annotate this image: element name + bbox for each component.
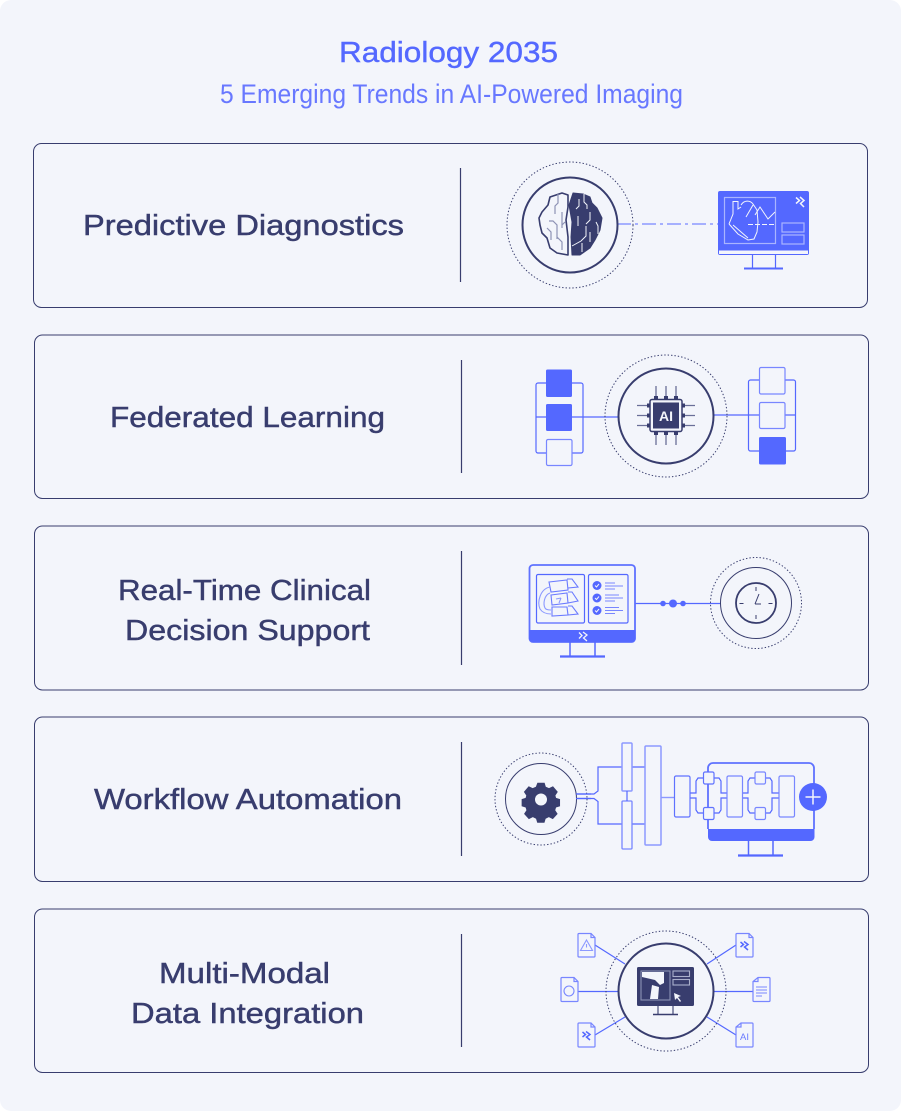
icon: gear in circle bbox=[495, 753, 591, 845]
diagram: right node group bbox=[712, 368, 796, 464]
heading: real-time clinical decision support: Real-Time Clinical bbox=[118, 575, 371, 607]
icon: document file bbox=[753, 978, 770, 1002]
icon: monitor with workflow bbox=[674, 763, 827, 856]
diagram: workflow branches bbox=[576, 743, 674, 849]
icon: heart monitor bbox=[718, 191, 809, 268]
icon: AI file bbox=[736, 1023, 753, 1047]
icon: brain in circle bbox=[507, 162, 633, 288]
heading: federated learning: Federated Learning bbox=[110, 402, 385, 434]
panel: workflow automation bbox=[34, 717, 868, 882]
icon: AI chip in circle bbox=[605, 355, 727, 477]
icon: warning file bbox=[578, 934, 595, 957]
heading: predictive diagnostics: Predictive Diagnostics bbox=[83, 210, 404, 242]
panel: real-time clinical decision support bbox=[34, 526, 868, 690]
icon: circle file bbox=[561, 978, 578, 1002]
icon: logo file right bbox=[736, 934, 753, 957]
panel: predictive diagnostics bbox=[34, 144, 868, 308]
icon: AI file: AI bbox=[740, 1032, 749, 1043]
subtitle: 5 Emerging Trends in AI-Powered Imaging bbox=[220, 79, 683, 109]
icon: clock in circle bbox=[710, 558, 802, 648]
diagram: left node group bbox=[536, 370, 620, 466]
connector: dashed line bbox=[617, 223, 718, 225]
heading: real-time clinical decision support bbox=[118, 575, 371, 647]
icon: AI chip in circle: AI bbox=[659, 408, 673, 424]
connector: dotted link bbox=[635, 600, 722, 608]
heading: multi-modal data integration bbox=[131, 958, 364, 1030]
panel: multi-modal data integration bbox=[34, 909, 868, 1072]
icon: logo file left bbox=[578, 1023, 595, 1047]
heading: multi-modal data integration: Multi-Modal bbox=[159, 958, 330, 990]
icon: monitor in circle bbox=[606, 931, 726, 1051]
title: Radiology 2035 bbox=[339, 37, 558, 69]
icon: spine monitor with checklist bbox=[529, 565, 636, 656]
connectors: files to monitor bbox=[578, 945, 753, 1035]
panel: federated learning bbox=[34, 335, 868, 498]
heading: multi-modal data integration: Data Integration bbox=[131, 998, 364, 1030]
heading: workflow automation: Workflow Automation bbox=[94, 784, 402, 816]
heading: real-time clinical decision support: Decision Support bbox=[125, 615, 370, 647]
